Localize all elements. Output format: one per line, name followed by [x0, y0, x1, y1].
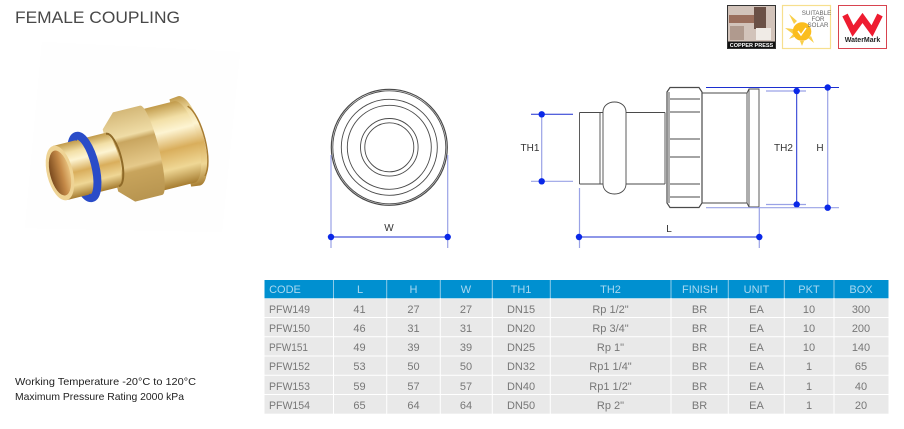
H dimension: H: [816, 143, 824, 154]
table header: UNIT: [744, 284, 770, 296]
row PFW153: Rp1 1/2": [589, 381, 632, 393]
row PFW154: [269, 400, 867, 412]
row PFW149: 300: [852, 304, 870, 316]
row PFW154: PFW154: [269, 400, 310, 412]
end view drawing: [328, 89, 451, 248]
row PFW150: PFW150: [269, 323, 310, 335]
concentric rings: [331, 89, 447, 205]
table header: FINISH: [682, 284, 718, 296]
TH1 dimension: [521, 111, 573, 184]
row PFW153: [269, 381, 867, 393]
table header: PKT: [798, 284, 820, 296]
badge: copper press: COPPER PRESS: [730, 43, 774, 49]
row PFW153: EA: [749, 381, 764, 393]
row PFW153: 1: [806, 381, 812, 393]
badge: copper press: [728, 6, 776, 49]
badge: WaterMark: [838, 6, 886, 48]
row PFW149: DN15: [507, 304, 535, 316]
row PFW154: EA: [749, 400, 764, 412]
side view drawing: [521, 84, 839, 248]
row PFW150: 31: [407, 323, 420, 335]
row PFW152: 50: [460, 361, 472, 373]
L dimension: [576, 188, 762, 248]
TH1 dimension: TH1: [521, 143, 540, 154]
row PFW151: 10: [803, 342, 815, 354]
operating conditions note: Maximum Pressure Rating 2000 kPa: [15, 391, 184, 403]
badge: suitable for solar: [782, 6, 831, 48]
row PFW150: DN20: [507, 323, 535, 335]
row PFW150: 200: [852, 323, 870, 335]
row PFW151: PFW151: [269, 342, 308, 354]
row PFW149: BR: [692, 304, 707, 316]
row PFW149: 27: [407, 304, 420, 316]
row PFW153: BR: [692, 381, 707, 393]
blue O-ring: [66, 133, 103, 201]
row PFW150: Rp 3/4": [592, 323, 629, 335]
badge: suitable for solar: FOR: [811, 16, 825, 23]
row PFW153: 40: [855, 381, 867, 393]
row PFW150: [269, 323, 870, 335]
row PFW154: 20: [855, 400, 867, 412]
row PFW150: 31: [460, 323, 472, 335]
row PFW153: PFW153: [269, 381, 310, 393]
row PFW149: 10: [803, 304, 815, 316]
L dimension: L: [666, 224, 672, 235]
row PFW151: [269, 342, 870, 354]
row PFW150: BR: [692, 323, 707, 335]
badge: suitable for solar: SOLAR: [808, 22, 829, 29]
row PFW154: 1: [806, 400, 812, 412]
body: [137, 98, 208, 192]
table header: BOX: [849, 284, 873, 296]
row PFW152: BR: [692, 361, 707, 373]
table header: CODE: [269, 284, 301, 296]
row PFW153: 57: [407, 381, 420, 393]
row PFW151: 39: [407, 342, 420, 354]
row PFW154: 64: [460, 400, 472, 412]
flange: [169, 93, 215, 188]
row PFW153: 59: [353, 381, 366, 393]
row PFW152: Rp1 1/4": [589, 361, 632, 373]
row PFW150: EA: [749, 323, 764, 335]
row PFW152: DN32: [507, 361, 535, 373]
operating conditions note: Working Temperature -20°C to 120°C: [15, 376, 196, 388]
hexagon nut: [99, 104, 170, 205]
row PFW152: 53: [353, 361, 366, 373]
row PFW152: 65: [855, 361, 867, 373]
row PFW149: PFW149: [269, 304, 310, 316]
row PFW151: 49: [353, 342, 366, 354]
row PFW154: Rp 2": [597, 400, 624, 412]
row PFW151: DN25: [507, 342, 535, 354]
row PFW149: [269, 304, 870, 316]
row PFW151: EA: [749, 342, 764, 354]
row PFW149: Rp 1/2": [592, 304, 629, 316]
row PFW150: 10: [803, 323, 815, 335]
fitting outline: [580, 88, 759, 208]
table header: TH1: [511, 284, 531, 296]
pipe: [53, 138, 97, 200]
row PFW150: 46: [353, 323, 366, 335]
TH2 dimension: [766, 88, 806, 208]
row PFW151: BR: [692, 342, 707, 354]
row PFW154: 64: [407, 400, 420, 412]
row PFW152: 50: [407, 361, 420, 373]
W dimension: [328, 155, 451, 248]
row PFW152: [269, 361, 867, 373]
row PFW154: BR: [692, 400, 707, 412]
badge: WaterMark: WaterMark: [845, 37, 880, 44]
title: FEMALE COUPLING: [15, 8, 180, 27]
row PFW154: DN50: [507, 400, 535, 412]
badge: suitable for solar: SUITABLE: [802, 10, 831, 17]
row PFW154: 65: [353, 400, 366, 412]
table header: L: [357, 284, 363, 296]
product photo: brass coupling: [25, 42, 240, 232]
table header: [264, 280, 888, 298]
row PFW153: DN40: [507, 381, 535, 393]
row PFW151: 140: [852, 342, 870, 354]
row PFW149: EA: [749, 304, 764, 316]
TH2 dimension: TH2: [774, 143, 793, 154]
row PFW152: PFW152: [269, 361, 310, 373]
row PFW151: Rp 1": [597, 342, 624, 354]
table header: TH2: [600, 284, 621, 296]
row PFW149: 27: [460, 304, 472, 316]
row PFW149: 41: [353, 304, 366, 316]
table header: W: [461, 284, 472, 296]
row PFW152: 1: [806, 361, 812, 373]
neck: [73, 131, 126, 195]
H dimension: [706, 84, 839, 211]
table header: H: [410, 284, 418, 296]
table rows background: [264, 298, 889, 414]
row PFW153: 57: [460, 381, 472, 393]
row PFW151: 39: [460, 342, 472, 354]
specification table: [264, 280, 889, 414]
row PFW152: EA: [749, 361, 764, 373]
operating conditions note: [15, 376, 196, 403]
W dimension: W: [384, 223, 394, 234]
